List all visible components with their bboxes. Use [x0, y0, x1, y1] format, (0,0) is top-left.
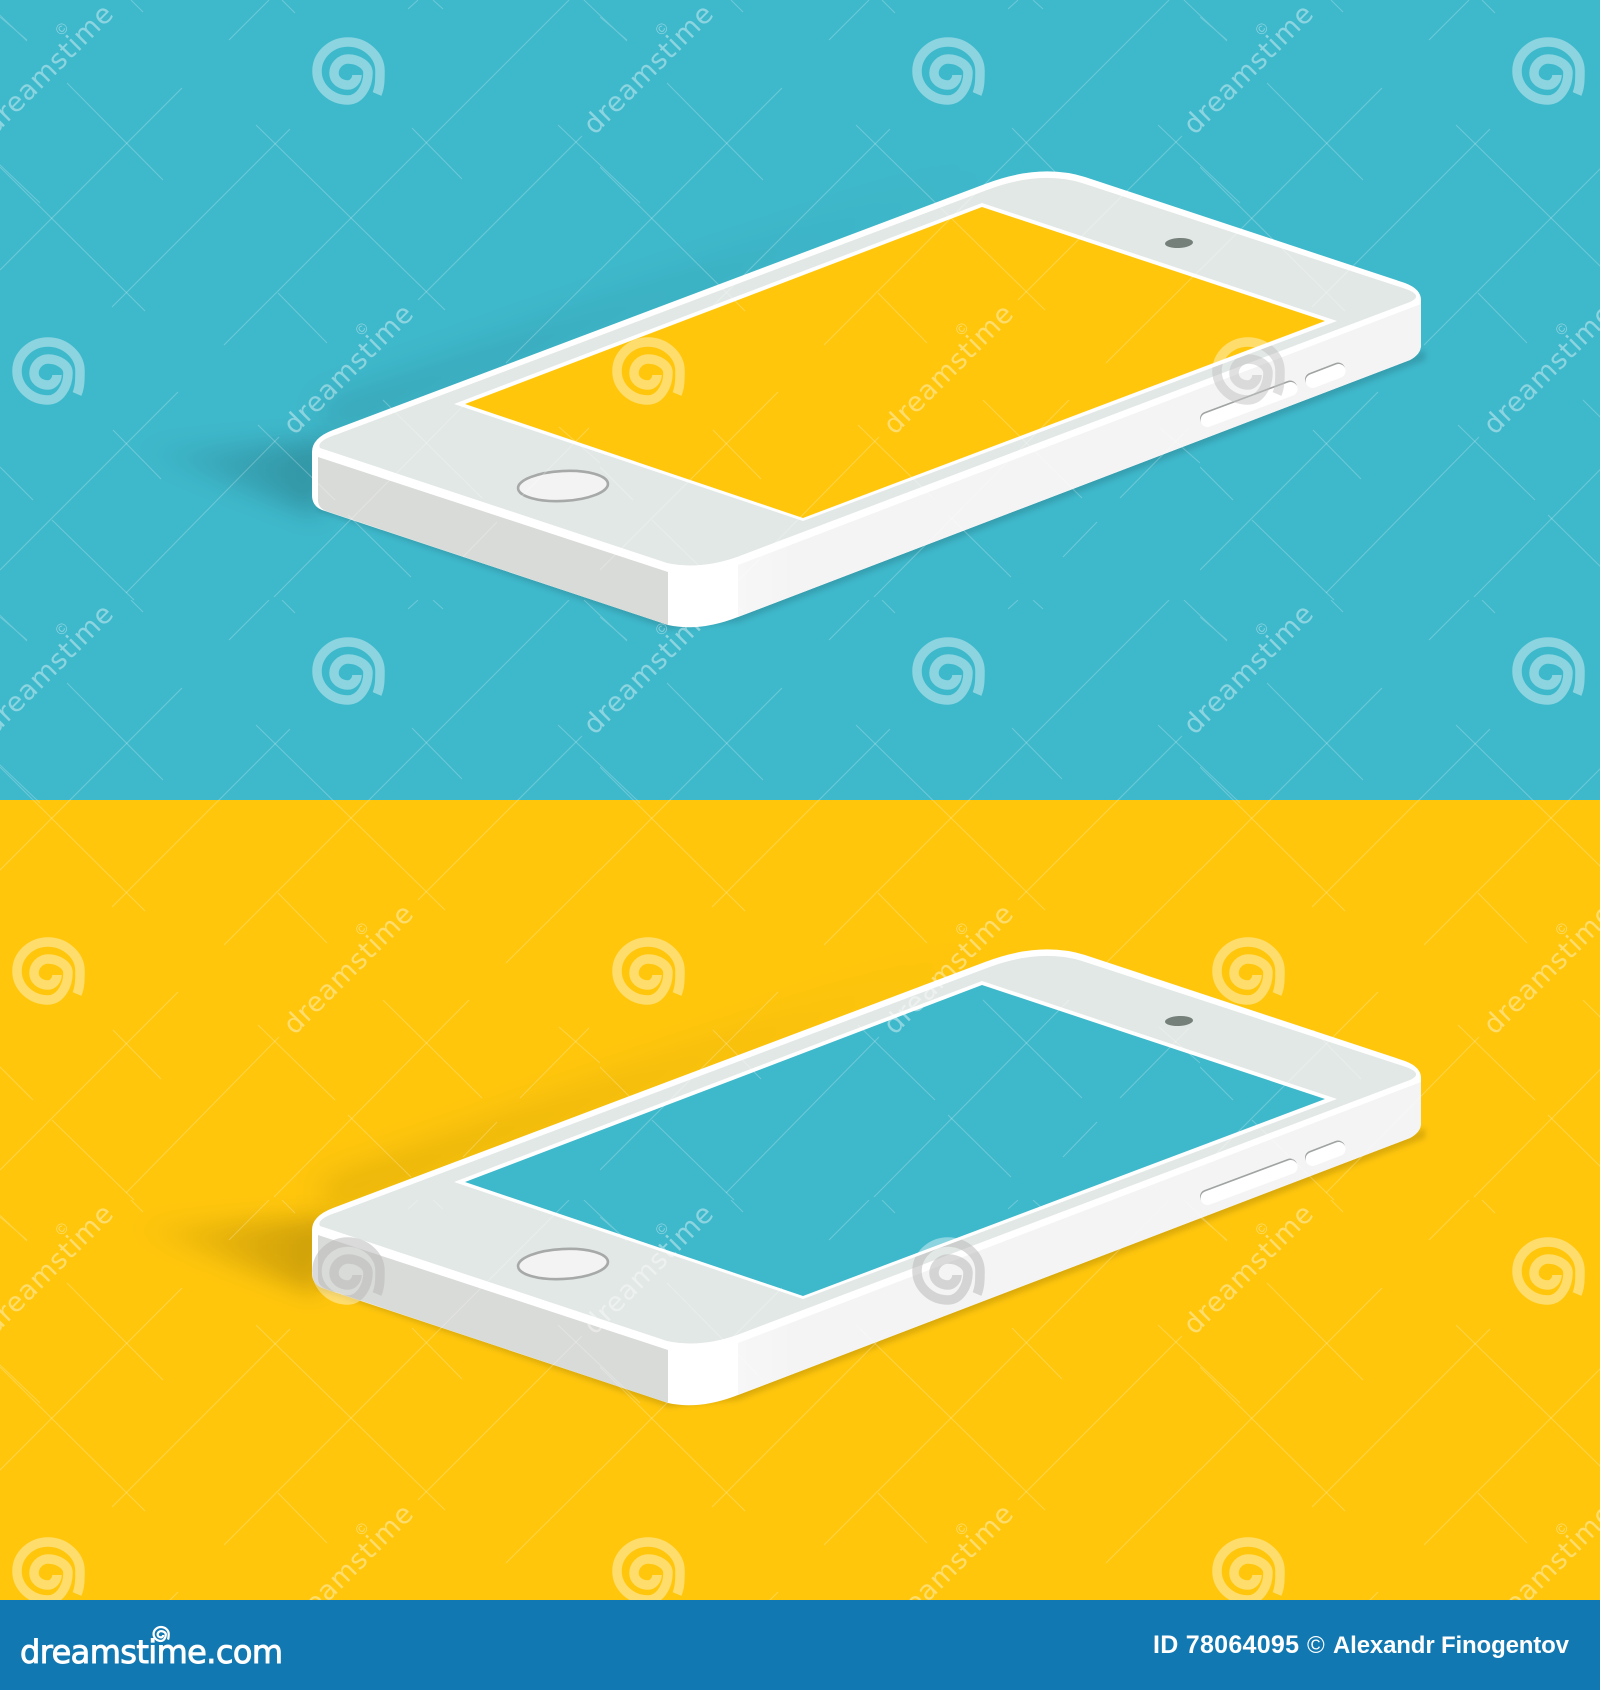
- watermark: dreamstime text: ©: [652, 1219, 672, 1239]
- watermark: dreamstime text: dreamstime: [878, 899, 1020, 1041]
- phone front face: [319, 178, 1416, 565]
- watermark: dreamstime text: ©: [1252, 19, 1272, 39]
- phone front face: [319, 956, 1416, 1343]
- footer brand text: dreamstime.com: [20, 1633, 283, 1671]
- camera: [1165, 237, 1193, 249]
- panel: blue background: [0, 0, 1600, 800]
- watermark: dreamstime text: ©: [1552, 319, 1572, 339]
- phone body outline: [312, 171, 1421, 627]
- watermark: dreamstime text: ©: [1252, 1219, 1272, 1239]
- watermark: dreamstime text: ©: [1252, 619, 1272, 639]
- watermark: dreamstime text: dreamstime: [1178, 0, 1320, 141]
- watermark: dreamstime text: ©: [952, 319, 972, 339]
- volume button: [1207, 388, 1291, 420]
- watermark: dreamstime text: dreamstime: [278, 1499, 420, 1641]
- phone: bottom, blue screen: [312, 949, 1421, 1405]
- phone short side: [318, 457, 668, 625]
- watermark: spiral tint over top phone: [1217, 342, 1280, 400]
- watermark: dreamstime text: dreamstime: [1178, 1199, 1320, 1341]
- phone long side: [738, 304, 1421, 617]
- footer credit: Alexandr Finogentov: [1333, 1632, 1570, 1659]
- watermark: dreamstime text: ©: [52, 1219, 72, 1239]
- watermark: dreamstime text: dreamstime: [878, 1499, 1020, 1641]
- watermark: dreamstime text: ©: [352, 319, 372, 339]
- watermark: spiral tint over bottom phone: [317, 1242, 980, 1300]
- volume button: [1207, 1166, 1291, 1198]
- watermark: dreamstime text: ©: [52, 19, 72, 39]
- shadow: top phone: [135, 165, 1425, 629]
- watermark: dreamstime text: ©: [652, 619, 672, 639]
- watermark: dreamstime text: dreamstime: [878, 299, 1020, 441]
- watermark: dreamstime text: ©: [52, 619, 72, 639]
- screen border: [454, 203, 1337, 521]
- footer bar: [0, 1600, 1600, 1690]
- phone long side: [738, 1082, 1421, 1395]
- screen border: [454, 981, 1337, 1299]
- watermark: dreamstime text: dreamstime: [578, 1199, 720, 1341]
- watermark: dreamstime text: ©: [952, 919, 972, 939]
- home button: [517, 469, 609, 503]
- footer spiral icon: [154, 1627, 169, 1641]
- footer credit: [1153, 1631, 1570, 1659]
- power button: [1312, 370, 1339, 381]
- panel: yellow background: [0, 800, 1600, 1600]
- watermark: dreamstime text: dreamstime: [278, 899, 420, 1041]
- footer credit: ©: [1307, 1632, 1325, 1659]
- shadow: bottom phone: [120, 943, 1425, 1407]
- watermark: dreamstime text: dreamstime: [578, 599, 720, 741]
- footer credit: ID 78064095: [1153, 1631, 1299, 1659]
- watermark: dreamstime text: ©: [652, 19, 672, 39]
- watermark: dreamstime text: ©: [1552, 919, 1572, 939]
- screen: [465, 207, 1325, 518]
- watermark: dreamstime text: ©: [352, 1519, 372, 1539]
- power button: [1312, 1148, 1339, 1159]
- screen: [465, 985, 1325, 1296]
- phone body outline: [312, 949, 1421, 1405]
- watermark: dreamstime text: ©: [1552, 1519, 1572, 1539]
- watermark: dreamstime text: dreamstime: [578, 0, 720, 141]
- phone: top, yellow screen: [312, 171, 1421, 627]
- watermark: dreamstime text: dreamstime: [278, 299, 420, 441]
- camera: [1165, 1015, 1193, 1027]
- watermark: dreamstime text: ©: [952, 1519, 972, 1539]
- phone short side: [318, 1235, 668, 1403]
- watermark: dreamstime text: dreamstime: [1178, 599, 1320, 741]
- watermark: dreamstime text: ©: [352, 919, 372, 939]
- home button: [517, 1247, 609, 1281]
